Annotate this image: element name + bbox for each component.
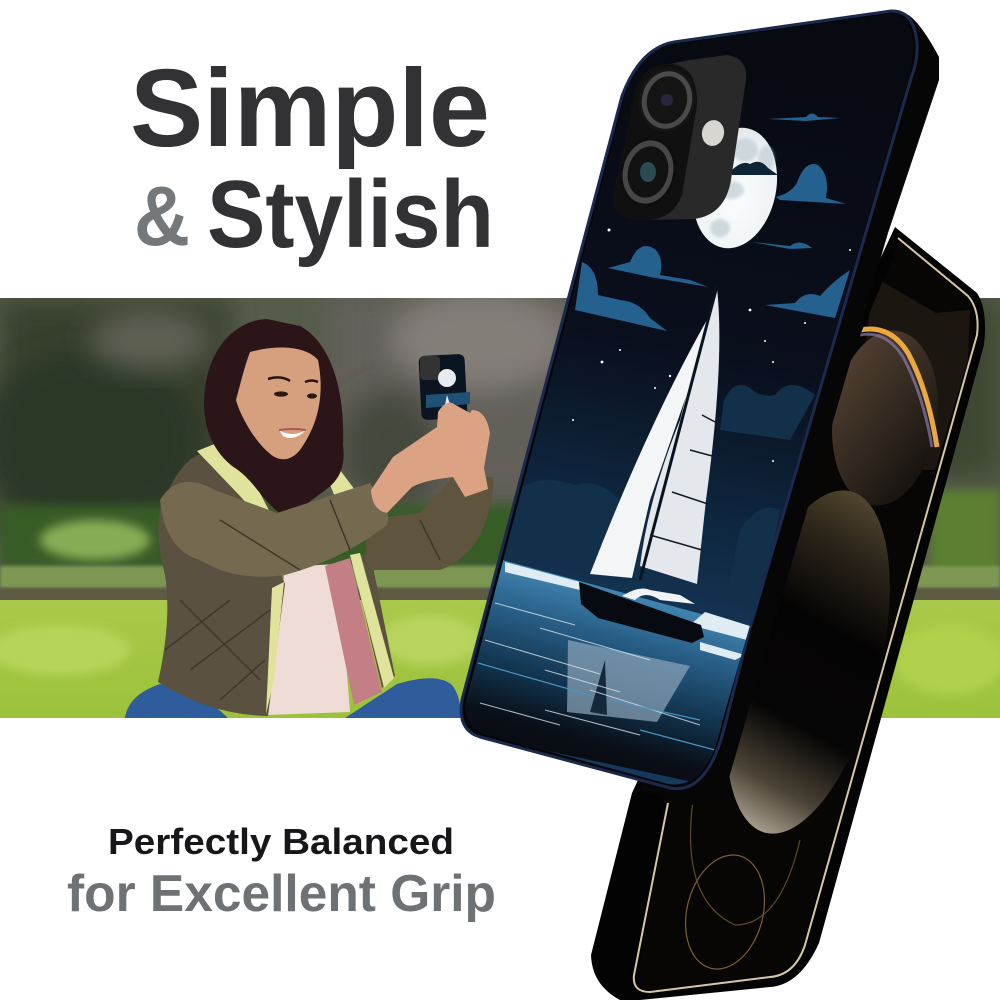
- camera lens lower: [612, 131, 684, 213]
- hull: [579, 582, 704, 643]
- jacket right front: [352, 552, 395, 688]
- stars: [572, 228, 851, 462]
- case outer: [461, 11, 917, 789]
- wallpaper swirl: [684, 282, 970, 970]
- face: [236, 347, 321, 459]
- clouds: [575, 114, 850, 331]
- right sail: [640, 288, 719, 584]
- ampersand: &: [134, 169, 190, 263]
- jeans: [125, 678, 460, 718]
- caption: for Excellent Grip: for Excellent Grip: [67, 865, 496, 923]
- cabin: [622, 588, 695, 604]
- back phone body: [591, 227, 985, 1000]
- artwork: [466, 64, 897, 784]
- rainbow arc: [860, 329, 937, 447]
- mast: [640, 286, 717, 580]
- woman taking a selfie: [125, 319, 493, 718]
- water: [466, 560, 750, 782]
- case side: [640, 12, 939, 805]
- dark clouds: [503, 385, 815, 560]
- yellow lining: [197, 443, 394, 714]
- raised arm, front: [160, 482, 388, 577]
- lens housing: [613, 64, 697, 220]
- hands: [371, 402, 490, 513]
- plaid shirt: [325, 558, 382, 705]
- water streak lines: [480, 603, 700, 735]
- heading: Simple: Simple: [130, 47, 490, 170]
- white crest: [505, 562, 750, 660]
- Stylish: Stylish: [207, 161, 494, 268]
- camera flash: [700, 118, 726, 148]
- hair: [204, 319, 344, 518]
- pink shirt: [268, 564, 350, 715]
- left sail: [590, 318, 708, 578]
- gold rim: [634, 238, 978, 992]
- photo band: park background: [0, 290, 1000, 718]
- reflection: [567, 640, 690, 722]
- heading: & Stylish: [134, 161, 494, 268]
- back phone: screen side: [591, 220, 990, 1000]
- jacket body: [158, 454, 285, 716]
- front phone: case back with sailboat art: [450, 0, 939, 805]
- camera lens upper: [632, 62, 702, 138]
- gold sphere swirl: [730, 490, 890, 834]
- camera island: [612, 55, 746, 220]
- moon: [696, 128, 778, 248]
- mini phone: [418, 354, 470, 420]
- facial features: [268, 377, 318, 438]
- moon craters: [710, 138, 774, 237]
- raised arm, rear: [365, 477, 493, 570]
- quilting lines: [165, 500, 440, 700]
- caption: Perfectly Balanced: Perfectly Balanced: [108, 821, 454, 862]
